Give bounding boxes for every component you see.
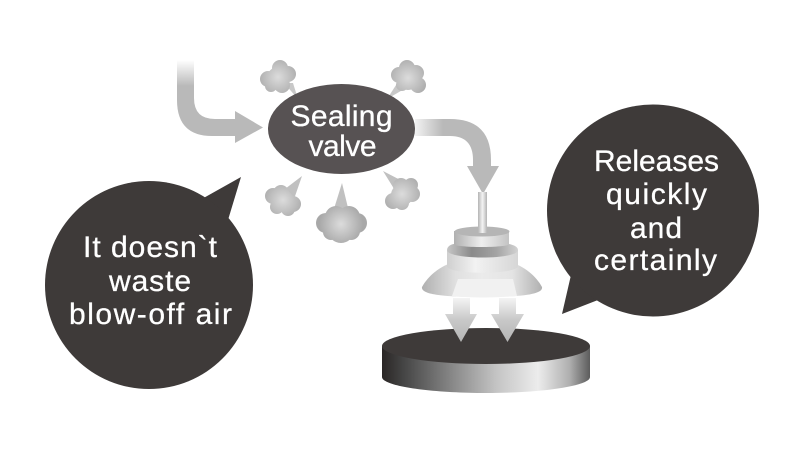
right bubble text: quickly [606, 178, 707, 211]
sealing valve label [290, 100, 392, 163]
right bubble text: certainly [594, 244, 717, 277]
left bubble text: It doesn`t [83, 231, 218, 264]
sealing valve label: valve [308, 130, 376, 163]
sealing valve label: Sealing [290, 100, 392, 133]
release arrow: right [491, 298, 524, 342]
speech bubble: left [45, 177, 253, 389]
exhaust puff: top left [260, 60, 298, 99]
release arrow: left [445, 298, 477, 342]
sealing valve ellipse [268, 84, 415, 174]
right bubble text [594, 145, 719, 277]
left bubble text [69, 231, 232, 331]
exhaust puff: top right [387, 60, 426, 99]
right bubble text: and [630, 212, 682, 245]
exhaust puff: bottom centre [316, 183, 367, 243]
outlet arrow [415, 119, 499, 194]
right bubble text: Releases [594, 145, 719, 178]
workpiece disk [382, 328, 590, 393]
suction cup [422, 192, 542, 298]
inlet arrow [177, 60, 263, 143]
exhaust puff: bottom left [265, 176, 302, 216]
speech bubble: right [547, 104, 759, 316]
left bubble text: waste [108, 265, 191, 298]
air stem into suction cup [478, 192, 487, 233]
left bubble text: blow-off air [69, 298, 232, 331]
exhaust puff: bottom right [383, 171, 420, 210]
